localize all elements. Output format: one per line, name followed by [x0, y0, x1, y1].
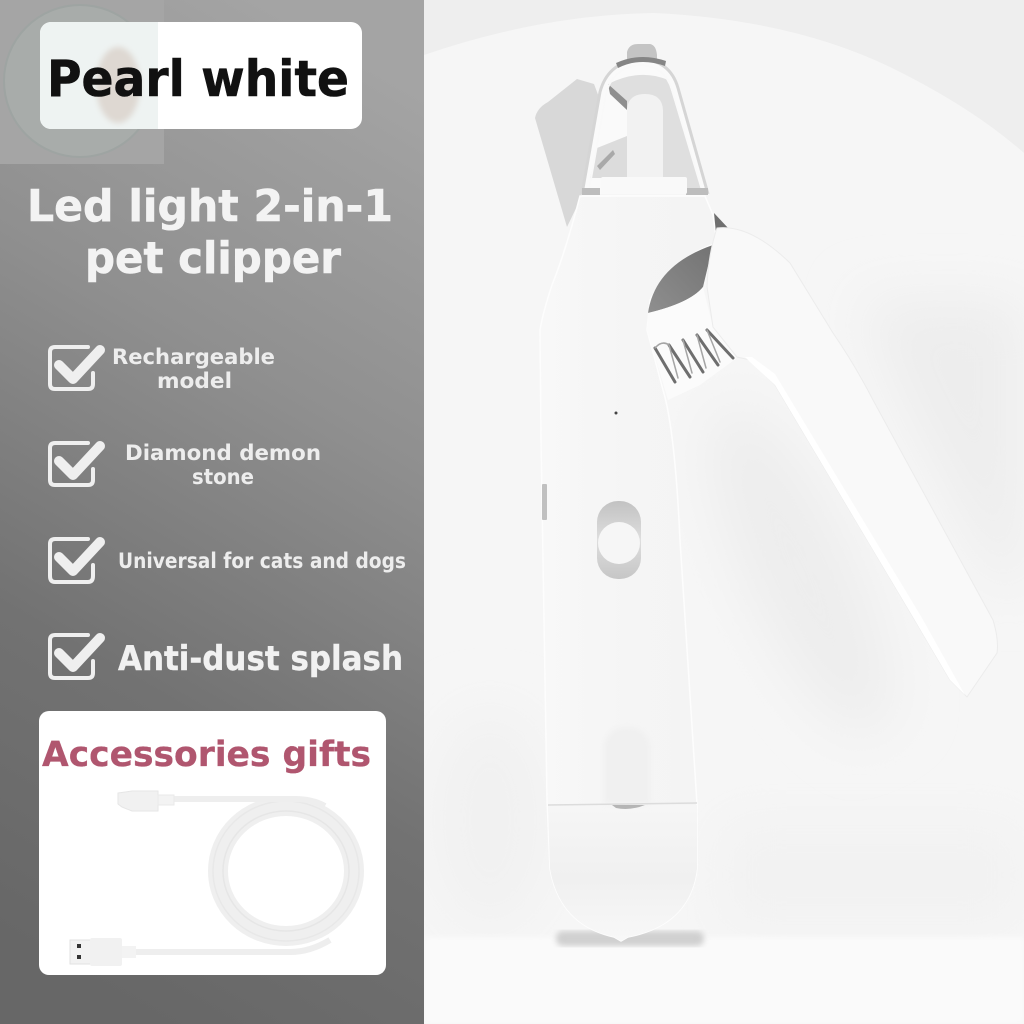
- label: stone: [192, 465, 254, 489]
- main body: [540, 196, 717, 941]
- icon: check box: [50, 539, 100, 582]
- badge: colour name: [40, 22, 362, 129]
- panel: photo background: [424, 0, 1024, 1024]
- illustration: USB cable: [70, 791, 359, 966]
- shadow: [556, 931, 704, 946]
- label: [112, 345, 275, 393]
- label: Diamond demon: [125, 441, 321, 465]
- lever handle: [707, 228, 998, 697]
- base seam: [548, 803, 697, 805]
- icon: check box: [50, 443, 100, 485]
- feature: diamond demon stone: [50, 441, 321, 489]
- steel bar: [608, 84, 627, 110]
- slide switch: [597, 501, 641, 579]
- spring: [655, 330, 733, 382]
- label: Rechargeable: [112, 345, 275, 369]
- title: [27, 181, 393, 284]
- badge: colour name: Pearl white: [47, 50, 349, 108]
- inner panel: [608, 75, 701, 188]
- battery end cap: [549, 824, 697, 916]
- steel pivot blade: [648, 245, 713, 313]
- icon: check box: [50, 635, 100, 678]
- cap tab: [627, 44, 657, 62]
- icon: check box: [50, 347, 100, 389]
- label: Anti-dust splash: [118, 639, 403, 679]
- light post: [627, 94, 663, 178]
- title: pet clipper: [85, 233, 341, 284]
- feature: anti-dust splash: [50, 635, 403, 679]
- stone wedge: [590, 136, 627, 178]
- handle underside strip: [745, 357, 965, 695]
- diamond file: [535, 79, 600, 227]
- panel: accessories gifts: [39, 711, 386, 975]
- cap outline: [582, 59, 708, 194]
- heading: Accessories gifts: [42, 735, 371, 775]
- feature: universal: [50, 539, 406, 582]
- label: [125, 441, 321, 489]
- illustration: nail clipper: [535, 44, 998, 946]
- label: model: [157, 369, 232, 393]
- USB port cover: [604, 727, 650, 804]
- logo watermark: [0, 0, 164, 164]
- indicator dot: [614, 412, 618, 414]
- feature: rechargeable model: [50, 345, 275, 393]
- title: Led light 2-in-1: [27, 181, 393, 232]
- panel: grey sidebar: [0, 0, 424, 1024]
- label: Universal for cats and dogs: [118, 549, 406, 573]
- clear cap: [582, 57, 708, 195]
- spring bed: [647, 287, 737, 400]
- side button: [542, 484, 547, 520]
